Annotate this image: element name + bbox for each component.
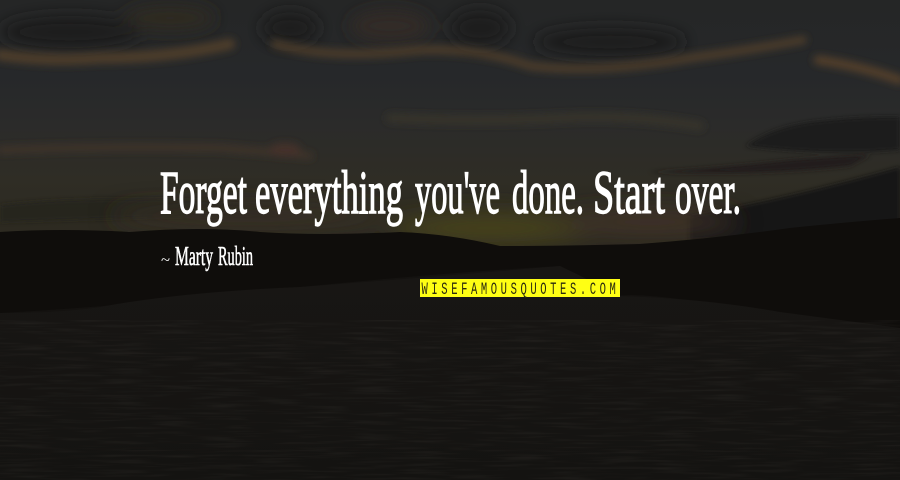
horizon warm glow: [110, 207, 740, 242]
word: over.: over.: [675, 160, 741, 227]
badge text: WISEFAMOUSQUOTES.COM: [422, 281, 619, 300]
author attribution: [161, 241, 253, 271]
dark shore land: [0, 218, 900, 328]
word: everything: everything: [255, 160, 403, 227]
orange cloud streaks: [0, 40, 900, 80]
tilde: ~: [161, 252, 170, 269]
dark upper clouds: [0, 6, 685, 56]
water ripples: [0, 320, 900, 480]
right dark cloud hills: [0, 117, 900, 240]
mid sky glow bands: [0, 117, 700, 157]
quote headline: [160, 160, 741, 227]
sky: [0, 0, 900, 250]
word: Start: Start: [593, 160, 665, 227]
word: Forget: Forget: [160, 160, 247, 227]
author last name: Rubin: [218, 241, 253, 271]
word: you've: you've: [415, 160, 500, 227]
badge background: [420, 279, 620, 297]
watermark badge: [420, 279, 620, 300]
word: done.: done.: [512, 160, 584, 227]
author first name: Marty: [175, 241, 213, 271]
lake: [0, 266, 900, 480]
